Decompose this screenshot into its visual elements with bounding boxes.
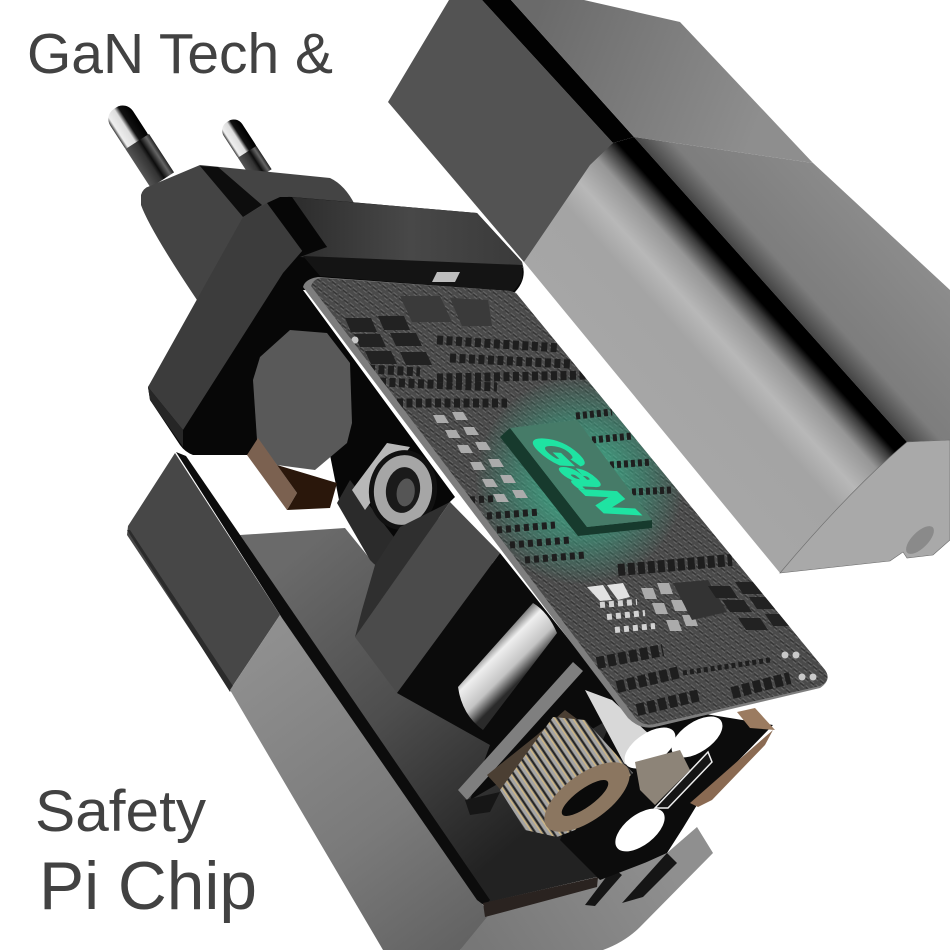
flange black stripe [267,197,327,252]
rows upper [350,340,590,403]
notch right [622,853,677,903]
capacitor label [352,443,410,510]
dark outer section [127,453,280,690]
cap of bottom shell [460,827,713,950]
rear black electronics [560,700,773,880]
left pin metal tip [104,101,154,157]
upper right face of top shell [511,0,813,163]
inductor hole [557,774,613,822]
pad rows [600,602,655,630]
heading: Safety: Safety [35,779,206,844]
ring centre [395,477,417,508]
white cylinder [585,690,650,765]
silver cylinder [458,603,557,730]
light front face of top shell [524,137,907,573]
right pin metal tip [218,116,261,165]
ring hole [383,465,423,515]
bottom rows [597,650,790,710]
back block shadow stripe [200,166,262,217]
gray transformer coil [253,330,352,470]
small right chips [708,582,795,630]
right of chip clusters [576,412,672,492]
USB-A port [690,730,773,807]
upper big chips [400,296,492,326]
heading: Pi Chip: Pi Chip [39,848,257,924]
inductor end face [533,749,641,845]
inductor winding body [500,717,633,837]
screw hole in end cap [902,522,938,558]
end cap of top shell [780,440,950,573]
board surface [311,278,828,725]
small row [683,660,770,673]
big chip right [450,298,492,326]
pad group left [433,412,528,502]
big chip left [400,296,452,322]
white pads beside chip [433,412,698,631]
right pin [218,116,272,181]
outer edge bevel [127,530,233,692]
chip glow [482,381,677,579]
dashed smd rows [350,340,790,710]
right pin sleeve [238,146,272,181]
plate underside [465,792,500,815]
USB-C opening [655,752,712,808]
reflective pattern group [587,583,655,630]
white reflective disc 1 [618,719,682,777]
flange lower bevel [148,387,183,447]
left pin [104,100,174,188]
flange top face [290,197,523,268]
right face of top shell [634,137,950,442]
divider plate [458,662,583,800]
black stripe on top shell [482,0,634,143]
flange left face [148,203,303,430]
notch left [585,868,622,906]
corner light dots [355,340,813,677]
USB-C port [635,750,690,805]
ring outer [364,446,442,534]
pad group right [641,583,698,631]
copper terminal light face [247,438,297,510]
ring body [369,451,437,529]
small window in lip [432,272,460,282]
black channel line [176,452,490,906]
mosfet row [345,316,432,365]
triangle left [587,585,612,601]
board edge [303,277,828,728]
GaN chip side [500,428,652,536]
back block of plug [141,165,355,300]
interior floor [240,510,640,903]
copper terminal dark face [277,465,337,510]
dark left face of top shell [388,0,613,262]
panel: top housing shell [388,0,950,573]
shaded wall beside block [355,502,450,637]
USB port top [737,708,775,730]
left pin sleeve [126,134,174,188]
triangle right [607,583,630,600]
row beneath chip [618,560,732,570]
large right chip [673,580,727,620]
panel: circuit board [303,277,828,728]
panel: interior components [355,502,775,880]
flange lip [303,256,522,292]
gray block [355,502,500,693]
black cavity [397,553,625,800]
panel: plug body [104,100,524,570]
GaN label on chip: GaN [514,436,653,517]
small vertical board [337,480,400,568]
capacitor ring [364,446,442,534]
black flange interior [148,197,524,570]
dense matrix [470,498,585,560]
mosfet blocks [345,316,432,365]
GaN chip top [510,420,652,527]
light outer section [230,615,487,950]
inductor hairy top [487,710,585,800]
white reflective disc 3 [608,800,672,860]
components clipped to board [345,296,813,710]
brown inner channel [483,877,598,917]
panel: bottom housing shell [127,452,713,950]
white reflective disc 2 [665,708,729,766]
panel: capacitor and small board [337,443,442,568]
title: GaN Tech &: GaN Tech & [27,22,333,86]
